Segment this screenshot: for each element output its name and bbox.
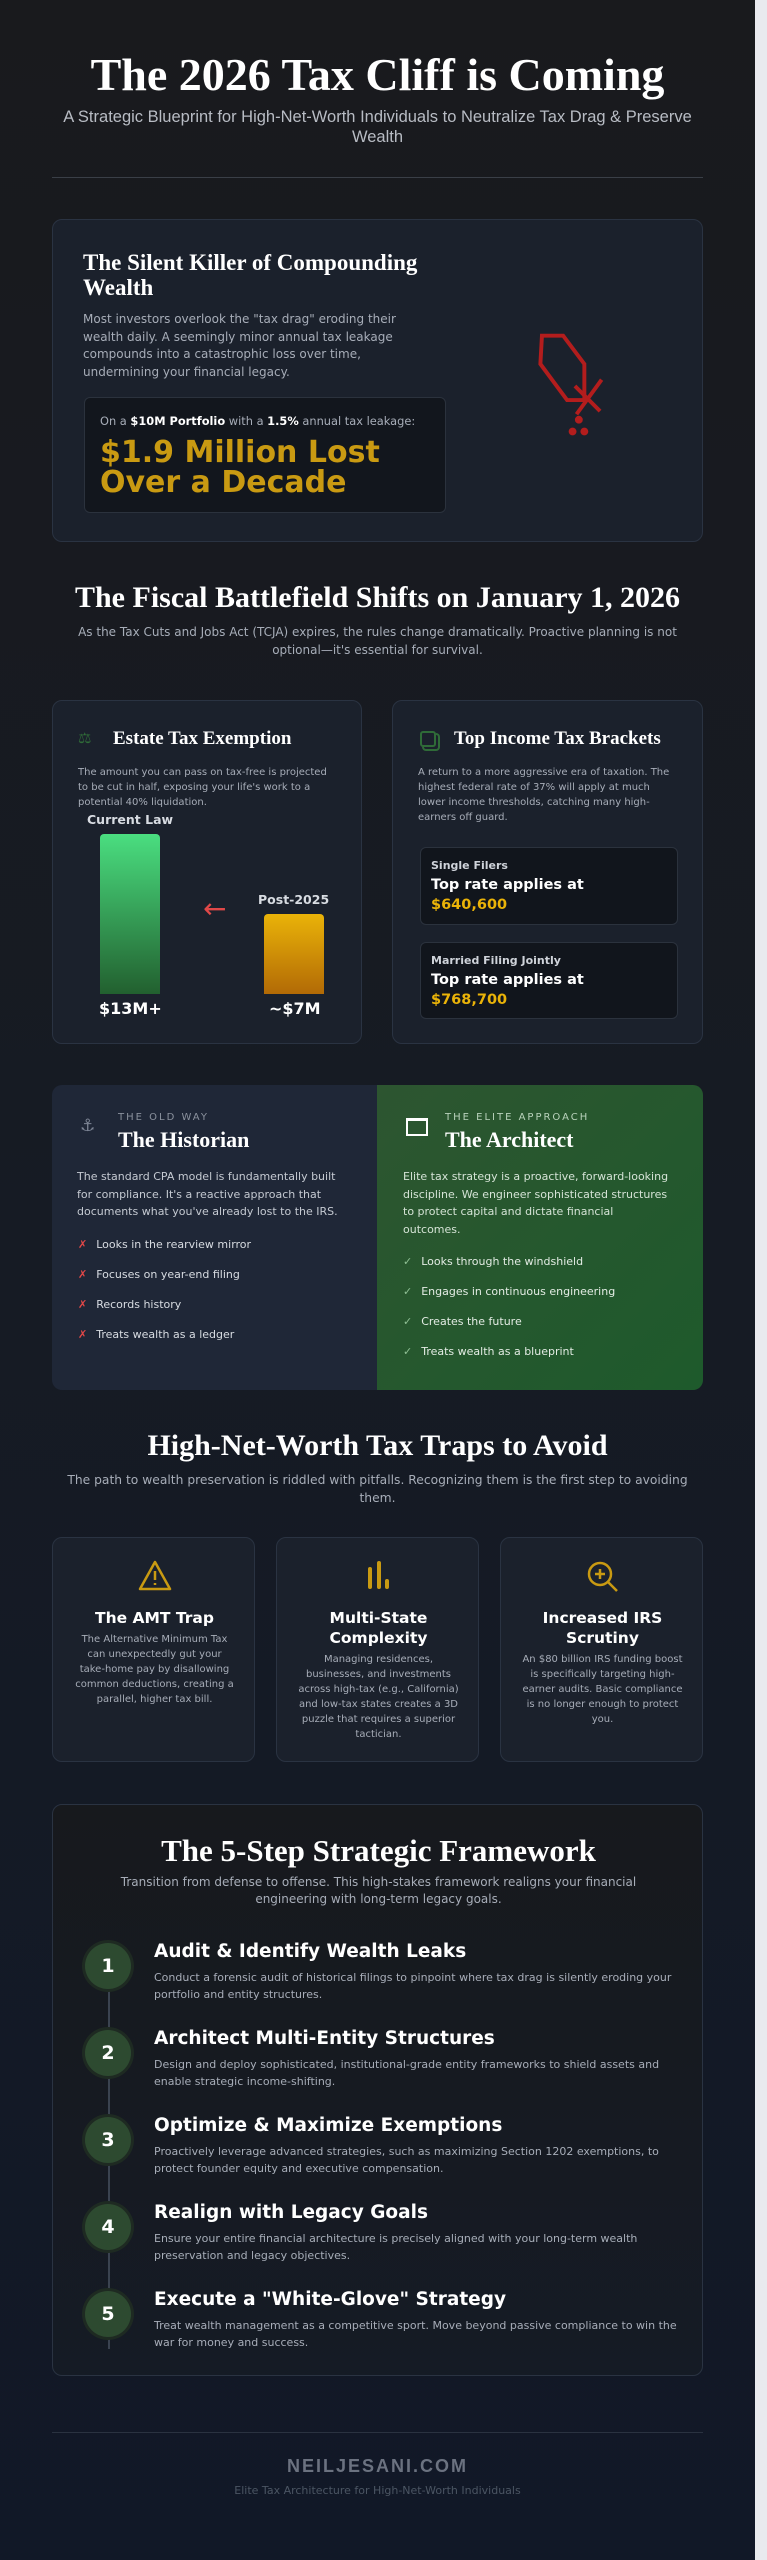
text: multi-state (298, 1654, 459, 1740)
text: IRS scrutiny: is specifically targeting high- (530, 1669, 675, 1680)
text: brackets description (418, 767, 669, 823)
icon: tag with x (538, 334, 604, 436)
panel: AMT trap (52, 1537, 255, 1762)
text: multi-state: businesses, and investments (306, 1669, 451, 1680)
step 1: Audit & Identify Wealth Leaks (154, 1941, 466, 1962)
heading: multi-state (330, 1609, 428, 1647)
list: historian traits (78, 1238, 251, 1341)
list: architect traits: ✓ Looks through the windshield (403, 1255, 583, 1268)
subtitle: framework: Transition from defense to offense. This high-stakes framework realigns your financial engineering with long-term legacy goals. (121, 1875, 636, 1906)
step 1 (82, 1940, 672, 2001)
panel: the architect: THE ELITE APPROACH (445, 1112, 589, 1123)
heading: silent killer: The Silent Killer of Compounding Wealth (83, 250, 417, 300)
step 1: 1 (101, 1955, 115, 1977)
text: architect description: to protect capital and dictate financial (403, 1205, 613, 1218)
text: historian description: for compliance. It's a reactive approach that (77, 1188, 321, 1201)
heading: architect: The Architect (445, 1127, 574, 1152)
heading: historian: The Historian (118, 1127, 249, 1152)
heading: estate tax: Estate Tax Exemption (113, 728, 291, 749)
list: architect traits: ✓ Creates the future (403, 1315, 522, 1328)
footer tagline: Elite Tax Architecture for High-Net-Worth Individuals (234, 2484, 521, 2497)
icon: brackets (420, 731, 436, 747)
text: multi-state: puzzle that requires a superior (302, 1714, 455, 1725)
text: AMT: take-home pay by disallowing (80, 1664, 229, 1675)
callout: single filers: Single Filers (431, 859, 508, 872)
callout: loss figure: $1.9 Million Lost Over a Decade (100, 435, 380, 500)
callout: married filing jointly: $768,700 (431, 992, 507, 1008)
icon: warning (138, 1560, 172, 1590)
text: AMT (75, 1634, 234, 1705)
panel: the historian: THE OLD WAY (118, 1112, 209, 1123)
arrow: ← (203, 892, 226, 925)
subtitle: fiscal battlefield (78, 625, 677, 657)
step 2: Architect Multi-Entity Structures (154, 2028, 495, 2049)
icon: money: ⚖ (78, 729, 91, 747)
text: estate description (78, 767, 327, 808)
subtitle: A Strategic Blueprint for High-Net-Worth Individuals to Neutralize Tax Drag & Preserve (63, 108, 692, 126)
text: IRS scrutiny: An $80 billion IRS funding boost (522, 1654, 683, 1665)
text: IRS scrutiny: is no longer enough to protect (527, 1699, 678, 1710)
panel: the architect (377, 1085, 703, 1390)
heading: income tax: Top Income Tax Brackets (454, 728, 661, 749)
step 3: 3 (101, 2129, 115, 2151)
text: estate description: to be cut in half, exposing your life's work to a potential 40% liquidation. (78, 782, 310, 808)
text: IRS scrutiny (522, 1654, 683, 1725)
icon: bars (368, 1561, 389, 1589)
text: AMT: common deductions, creating a (75, 1679, 234, 1690)
text: brackets description: earners off guard. (418, 812, 508, 823)
step 5 (82, 2288, 677, 2349)
text: AMT: The Alternative Minimum Tax (82, 1634, 227, 1645)
subtitle: tax traps: The path to wealth preservation is riddled with pitfalls. Recognizing them is the first step to avoiding (67, 1473, 688, 1487)
text: architect description: outcomes. (403, 1223, 461, 1236)
step 5: Treat wealth management as a competitive sport. Move beyond passive compliance to win the war for money and success. (154, 2319, 677, 2349)
text: multi-state: Managing residences, (324, 1654, 433, 1665)
text: IRS scrutiny: you. (592, 1714, 613, 1725)
bar chart: exemption (87, 812, 329, 1018)
step 5: 5 (101, 2303, 115, 2325)
list: historian traits: ✗ Records history (78, 1298, 181, 1311)
bar chart: exemption: ~$7M (269, 999, 321, 1018)
panel: historian vs architect (52, 1085, 703, 1390)
heading: multi-state: Complexity (330, 1629, 427, 1647)
panel: silent killer (52, 219, 703, 542)
text: brackets description: A return to a more aggressive era of taxation. The (418, 767, 669, 778)
icon: magnifier (588, 1562, 618, 1592)
panel: income tax brackets (392, 700, 703, 1044)
step 4 (82, 2201, 637, 2262)
step 3: Proactively leverage advanced strategies, such as maximizing Section 1202 exemptions, to protect founder equity and executive compensation. (154, 2145, 659, 2175)
heading: fiscal battlefield: The Fiscal Battlefield Shifts on January 1, 2026 (75, 581, 680, 614)
callout: single filers (420, 847, 678, 925)
callout: single filers: Top rate applies at (431, 877, 584, 893)
subtitle: fiscal battlefield: As the Tax Cuts and Jobs Act (TCJA) expires, the rules change dramatically. Proactive planning is not (78, 625, 677, 639)
step 1: Conduct a forensic audit of historical filings to pinpoint where tax drag is silently eroding your portfolio and entity structures. (154, 1971, 671, 2001)
subtitle: fiscal battlefield: optional—it's essential for survival. (272, 643, 483, 657)
list: architect traits: ✓ Engages in continuous engineering (403, 1285, 615, 1298)
step 3: Optimize & Maximize Exemptions (154, 2115, 502, 2136)
icon: blueprint (406, 1118, 428, 1136)
heading: multi-state: Multi-State (330, 1609, 427, 1627)
panel: 5-step framework (52, 1804, 703, 2376)
step 4: 4 (101, 2216, 115, 2238)
callout: married filing jointly: Top rate applies at (431, 972, 584, 988)
text: architect description: Elite tax strategy is a proactive, forward-looking (403, 1170, 668, 1183)
text: historian description: The standard CPA model is fundamentally built (77, 1170, 335, 1183)
heading: framework: The 5-Step Strategic Framework (161, 1833, 596, 1868)
callout: single filers: $640,600 (431, 897, 507, 913)
text: brackets description: lower income thresholds, catching many high- (418, 797, 650, 808)
heading: IRS scrutiny: Increased IRS (543, 1609, 662, 1627)
callout: loss figure: On a $10M Portfolio with a 1.5% annual tax leakage: (100, 414, 415, 428)
text: tax drag description: Most investors overlook the "tax drag" eroding their wealth daily. A seemingly minor annual tax leakage compounds into a catastrophic loss over time, undermining your financial legacy. (83, 312, 396, 379)
heading: AMT: The AMT Trap (95, 1609, 214, 1627)
step 5: Execute a "White-Glove" Strategy (154, 2289, 506, 2310)
step 4: Realign with Legacy Goals (154, 2202, 428, 2223)
title: The 2026 Tax Cliff is Coming (91, 49, 664, 100)
subtitle: tax traps (67, 1473, 688, 1505)
heading: IRS scrutiny (543, 1609, 662, 1647)
subtitle (63, 108, 692, 146)
panel: multi-state (276, 1537, 479, 1762)
step 4: Ensure your entire financial architecture is precisely aligned with your long-term wealth preservation and legacy objectives. (154, 2232, 637, 2262)
text: multi-state: across high-tax (e.g., California) (298, 1684, 459, 1695)
text: architect description: discipline. We engineer sophisticated structures (403, 1188, 667, 1201)
bar chart: exemption: Current Law (87, 812, 173, 827)
footer brand: NEILJESANI.COM (287, 2456, 468, 2476)
step 3 (82, 2114, 659, 2175)
icon: anchor: ⚓ (80, 1116, 95, 1136)
panel: estate tax exemption (52, 700, 362, 1044)
callout: loss figure (84, 397, 446, 513)
text: historian description: documents what you've already lost to the IRS. (77, 1205, 338, 1218)
text: AMT: can unexpectedly gut your (87, 1649, 222, 1660)
text: architect description (403, 1170, 668, 1236)
subtitle: tax traps: them. (359, 1491, 396, 1505)
subtitle: Wealth (352, 128, 403, 146)
text: IRS scrutiny: earner audits. Basic compliance (522, 1684, 683, 1695)
list: historian traits: ✗ Treats wealth as a ledger (78, 1328, 234, 1341)
text: multi-state: tactician. (355, 1729, 402, 1740)
panel: IRS scrutiny (500, 1537, 703, 1762)
text: AMT: parallel, higher tax bill. (97, 1694, 212, 1705)
heading: IRS scrutiny: Scrutiny (566, 1629, 639, 1647)
callout: married filing jointly (420, 942, 678, 1019)
text: multi-state: and low-tax states creates a 3D (299, 1699, 458, 1710)
heading: tax traps: High-Net-Worth Tax Traps to Avoid (147, 1429, 608, 1462)
list: historian traits: ✗ Focuses on year-end filing (78, 1268, 240, 1281)
bar chart: exemption: $13M+ (99, 999, 162, 1018)
text: estate description: The amount you can pass on tax-free is projected (78, 767, 327, 778)
callout: married filing jointly: Married Filing Jointly (431, 954, 561, 967)
list: historian traits: ✗ Looks in the rearview mirror (78, 1238, 251, 1251)
list: architect traits (403, 1255, 615, 1358)
panel: the historian (52, 1085, 377, 1390)
bar chart: exemption: Post-2025 (258, 892, 329, 907)
list: architect traits: ✓ Treats wealth as a blueprint (403, 1345, 574, 1358)
step 2: Design and deploy sophisticated, institutional-grade entity frameworks to shield assets and enable strategic income-shifting. (154, 2058, 659, 2088)
text: historian description (76, 1170, 338, 1218)
step 2 (82, 2027, 659, 2088)
step 2: 2 (101, 2042, 115, 2064)
text: brackets description: highest federal rate of 37% will apply at much (418, 782, 650, 793)
